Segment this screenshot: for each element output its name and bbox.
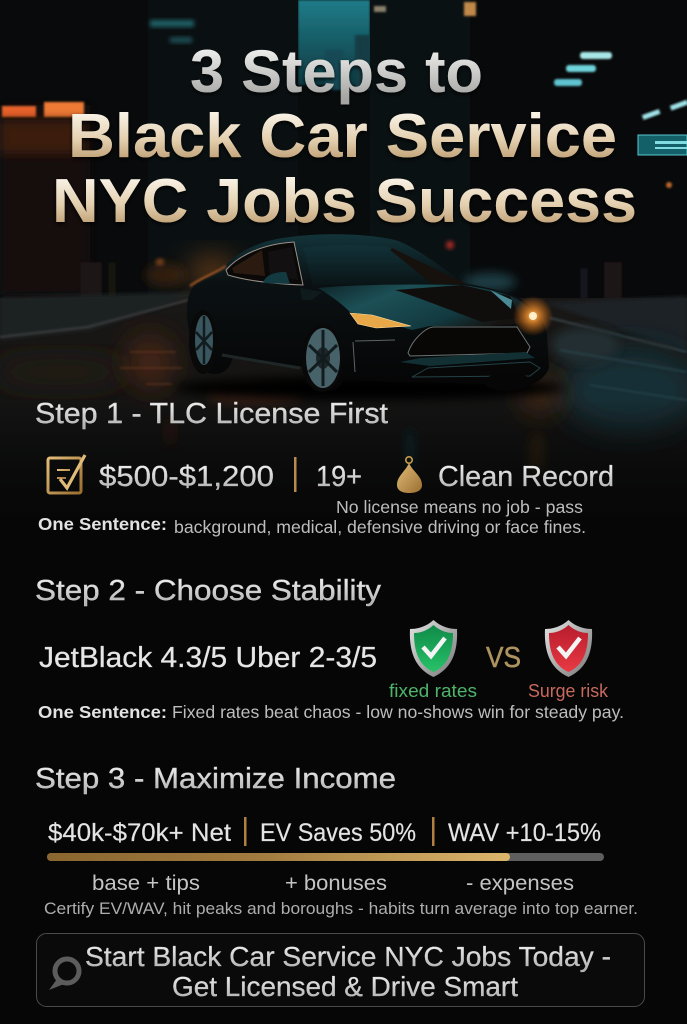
icon: gold checklist — [48, 455, 85, 493]
call to action box — [36, 934, 644, 1006]
icon: speech ring — [49, 959, 79, 990]
progress bar — [47, 853, 604, 861]
income stats row — [48, 817, 601, 847]
stat: clean record: Clean Record — [438, 461, 614, 493]
teal sky gap — [298, 0, 370, 90]
car body — [187, 234, 549, 392]
hood — [318, 284, 538, 330]
call to action text — [85, 941, 611, 1002]
one sentence summary: background, medical, defensive driving or face fines. — [174, 517, 586, 537]
headlight — [350, 313, 411, 328]
heading: step 2: Step 2 - Choose Stability — [35, 575, 382, 607]
label: vs: VS — [486, 642, 521, 674]
label: surge risk: Surge risk — [528, 681, 609, 701]
title: Black Car Service — [68, 102, 617, 171]
one sentence summary: Fixed rates beat chaos - low no-shows win for steady pay. — [172, 702, 624, 722]
icon: green shield — [410, 620, 457, 677]
panel: step 1 TLC license — [35, 398, 614, 537]
income stats row: EV Saves 50% — [260, 819, 416, 847]
headlamp glare — [513, 296, 553, 336]
grille — [408, 327, 530, 356]
windshield — [303, 245, 466, 285]
one sentence summary: One Sentence: — [38, 702, 167, 722]
bar labels — [92, 872, 574, 895]
income stats row: $40k-$70k+ Net — [48, 819, 231, 847]
one sentence summary — [38, 497, 586, 537]
call to action text: Start Black Car Service NYC Jobs Today - — [85, 941, 611, 972]
door mirror — [263, 272, 290, 284]
one sentence summary: No license means no job - pass — [336, 497, 583, 517]
front right tyre — [484, 373, 532, 391]
door highlights — [300, 288, 322, 300]
rear wheel — [189, 310, 217, 374]
icon: gold drop — [397, 457, 422, 493]
income stats row: WAV +10-15% — [448, 819, 601, 847]
title: NYC Jobs Success — [52, 167, 637, 236]
road reflections — [0, 327, 687, 477]
panel: step 2 choose stability — [35, 575, 624, 722]
comparison ratings: JetBlack 4.3/5 Uber 2-3/5 — [39, 642, 377, 674]
call to action text: Get Licensed & Drive Smart — [172, 971, 518, 1002]
side windows — [226, 242, 303, 285]
icon: red shield — [545, 620, 592, 677]
black car illustration — [175, 234, 565, 400]
left sidewalk — [0, 292, 190, 340]
right sidewalk — [545, 296, 687, 352]
label: fixed rates: fixed rates — [389, 681, 477, 701]
title — [52, 38, 637, 236]
divider: stat separator — [294, 457, 296, 492]
stat: minimum age: 19+ — [316, 461, 362, 493]
summary sentence: Certify EV/WAV, hit peaks and boroughs - habits turn average into top earner. — [44, 899, 638, 918]
left buildings — [0, 0, 298, 306]
front wheel — [301, 324, 343, 392]
heading: step 1: Step 1 - TLC License First — [35, 398, 388, 430]
panel: step 3 maximize income — [35, 763, 638, 918]
bar labels: - expenses — [466, 872, 574, 895]
title: 3 Steps to — [190, 38, 483, 105]
right buildings and neon — [370, 0, 687, 308]
road — [0, 298, 687, 518]
rear orange rim light — [190, 266, 226, 286]
stat: fee range: $500-$1,200 — [99, 461, 274, 493]
bar labels: base + tips — [92, 872, 200, 895]
one sentence summary: One Sentence: — [38, 514, 167, 534]
bar labels: + bonuses — [285, 872, 387, 895]
heading: step 3: Step 3 - Maximize Income — [35, 763, 396, 795]
